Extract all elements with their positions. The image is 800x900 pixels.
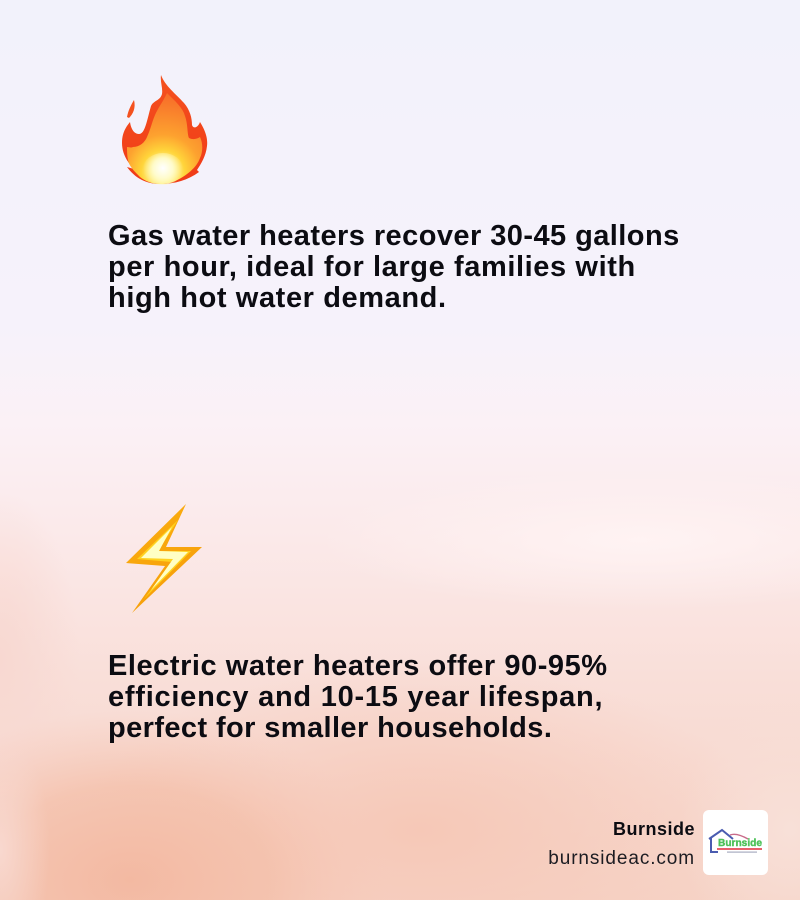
logo card bbox=[703, 810, 768, 875]
heading: gas water heaters: Gas water heaters recover 30-45 gallons bbox=[108, 220, 680, 252]
heading: gas water heaters bbox=[108, 220, 680, 314]
brand website: burnsideac.com bbox=[548, 848, 695, 869]
heading: electric water heaters: perfect for smaller households. bbox=[108, 712, 552, 744]
heading: electric water heaters: efficiency and 10-15 year lifespan, bbox=[108, 681, 603, 713]
icon: lightning bolt bbox=[126, 504, 202, 613]
brand name: Burnside bbox=[613, 819, 695, 839]
heading: electric water heaters: Electric water heaters offer 90-95% bbox=[108, 650, 608, 682]
logo: Burnside house bbox=[708, 828, 762, 853]
logo: Burnside house: Burnside bbox=[718, 838, 762, 849]
heading: gas water heaters: per hour, ideal for large families with bbox=[108, 251, 636, 283]
heading: gas water heaters: high hot water demand. bbox=[108, 282, 447, 314]
heading: electric water heaters bbox=[108, 650, 608, 744]
icon: flame bbox=[122, 75, 208, 185]
